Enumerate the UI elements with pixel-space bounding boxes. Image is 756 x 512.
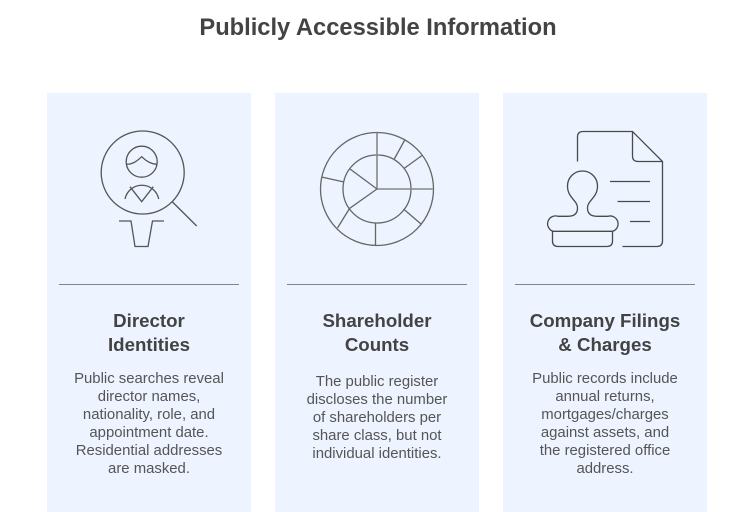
icon: document with stamp — [546, 130, 664, 248]
text block: address. — [576, 461, 634, 477]
text block: the registered office — [540, 443, 670, 459]
text block: against assets, and — [541, 425, 669, 441]
heading — [530, 310, 680, 355]
text block: The public register — [316, 374, 438, 390]
icon: magnifier over person — [100, 130, 198, 248]
text block: individual identities. — [312, 446, 442, 462]
text block — [74, 371, 224, 477]
text block — [532, 371, 678, 477]
heading: Counts — [345, 334, 409, 355]
text block: annual returns, — [555, 389, 655, 405]
text block — [307, 374, 448, 462]
heading: Shareholder — [322, 310, 432, 331]
title: Publicly Accessible Information — [199, 15, 557, 41]
text block: appointment date. — [89, 425, 209, 441]
text block: are masked. — [108, 461, 190, 477]
text block: share class, but not — [312, 428, 442, 444]
text block: Residential addresses — [76, 443, 222, 459]
panel: shareholder counts — [275, 93, 479, 512]
heading — [322, 310, 432, 355]
text block: of shareholders per — [313, 410, 441, 426]
panel: company filings — [503, 93, 707, 512]
icon: segmented ring chart — [320, 132, 434, 246]
text block: discloses the number — [307, 392, 447, 408]
text block: Public records include — [532, 371, 678, 387]
heading: Company Filings — [530, 310, 680, 331]
text block: nationality, role, and — [83, 407, 215, 423]
heading: Director — [113, 310, 185, 331]
heading: Identities — [108, 334, 190, 355]
heading — [108, 310, 190, 355]
text block: director names, — [98, 389, 200, 405]
text block: mortgages/charges — [541, 407, 669, 423]
panel: director identities — [47, 93, 251, 512]
heading: & Charges — [558, 334, 652, 355]
text block: Public searches reveal — [74, 371, 224, 387]
